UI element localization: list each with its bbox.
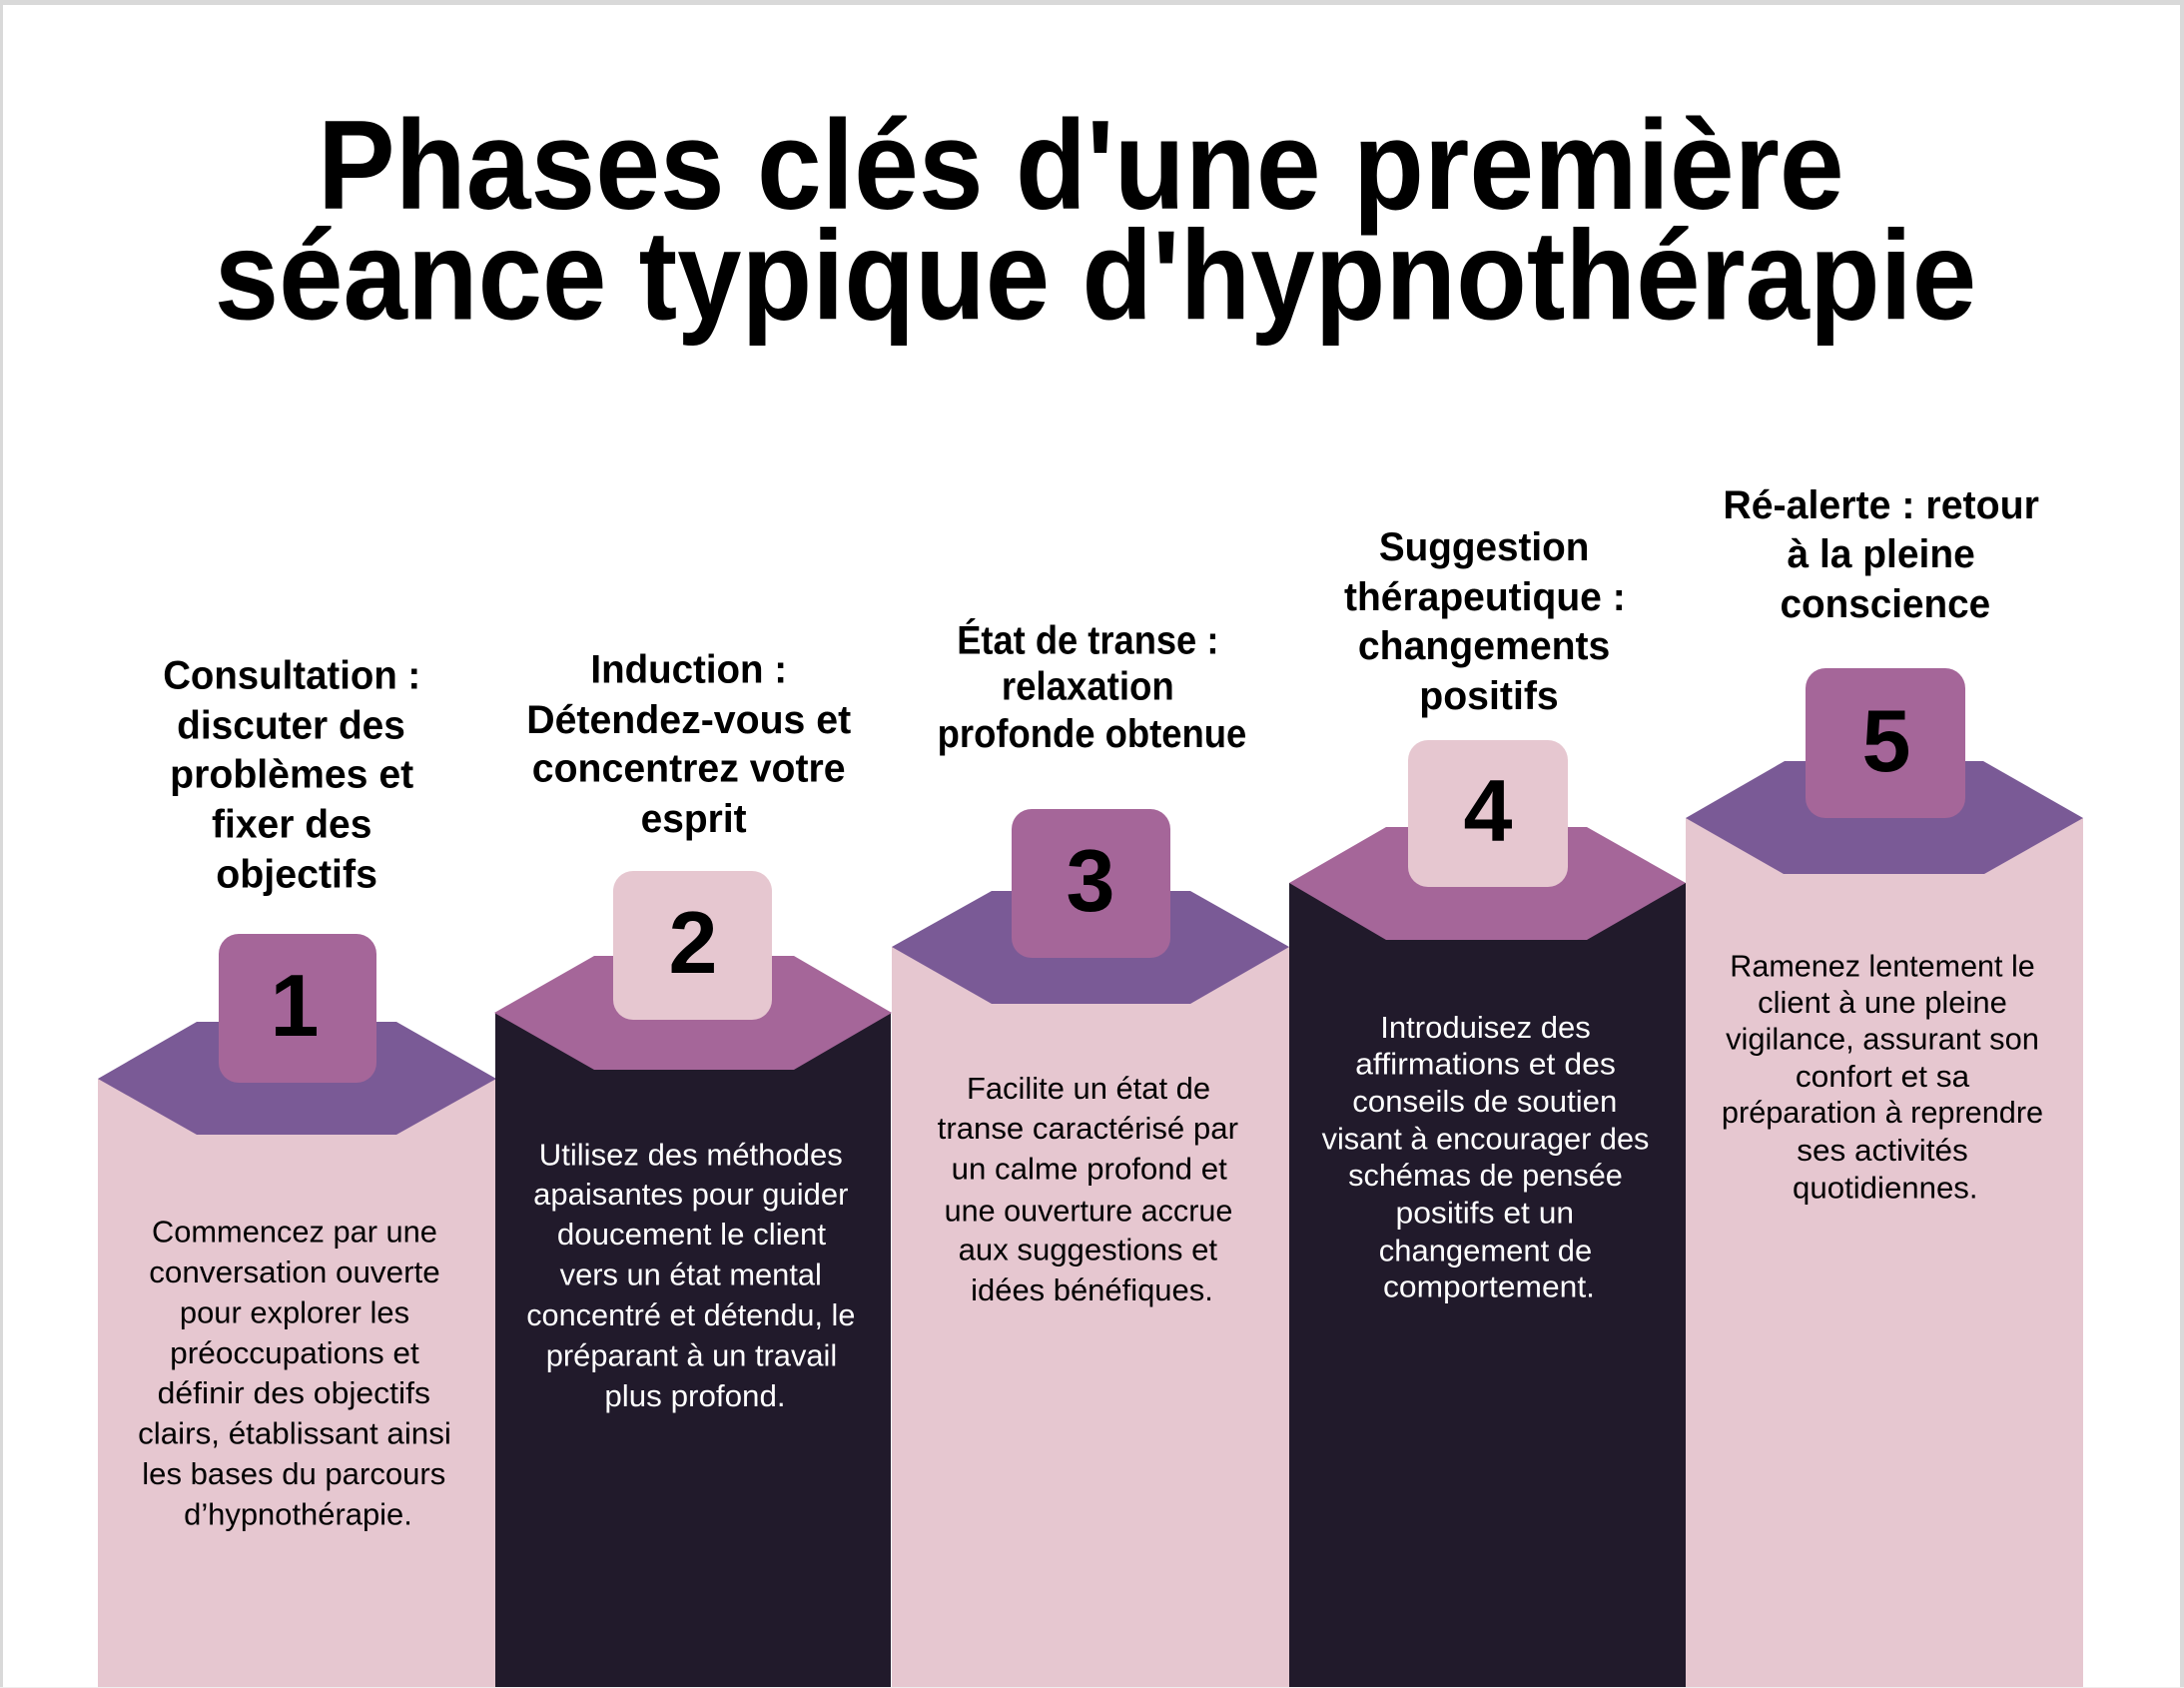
step 5 hexagon: [1686, 761, 2083, 874]
step 4 description: conseils de soutien: [1352, 1084, 1617, 1119]
step 3 description: aux suggestions et: [959, 1233, 1218, 1267]
step 5 description: vigilance, assurant son: [1726, 1021, 2039, 1056]
step 4 heading: positifs: [1419, 674, 1559, 718]
step 5 number: 5: [1862, 691, 1910, 790]
step 2 column: [495, 1013, 891, 1687]
step 2 description: apaisantes pour guider: [533, 1177, 848, 1212]
step 4 description: comportement.: [1383, 1269, 1595, 1304]
step 1 heading: problèmes et: [170, 752, 413, 796]
panel: step 5 re-alerte: [1686, 483, 2083, 1687]
step 3 description: un calme profond et: [952, 1152, 1227, 1187]
step 4 description: affirmations et des: [1355, 1046, 1616, 1081]
step 5 description: ses activités: [1797, 1133, 1968, 1168]
step 1 description: pour explorer les: [180, 1294, 409, 1329]
step 5 description: [1722, 949, 2043, 1206]
step 3 description: idées bénéfiques.: [971, 1272, 1213, 1307]
step 1 heading: fixer des: [212, 803, 371, 847]
panel: step 3 transe: [892, 617, 1289, 1687]
step 1 heading: Consultation :: [163, 653, 420, 697]
step 1 column: [98, 1079, 495, 1687]
step 3 heading: [938, 617, 1246, 756]
title: [215, 94, 1976, 346]
step 1 description: [138, 1214, 451, 1532]
step 4 description: [1322, 1010, 1649, 1304]
step 2 heading: [526, 648, 851, 841]
step 1 description: d’hypnothérapie.: [184, 1497, 412, 1532]
step 5 heading: [1723, 483, 2039, 626]
step 2 description: préparant à un travail: [546, 1338, 837, 1373]
step 2 number: 2: [669, 893, 717, 992]
step 2 number badge: [613, 871, 772, 1020]
step 2 heading: esprit: [641, 797, 747, 841]
step 5 description: quotidiennes.: [1793, 1171, 1978, 1206]
title: Phases clés d'une première: [318, 94, 1844, 236]
step 1 number badge: [219, 934, 376, 1083]
step 4 description: positifs et un: [1396, 1196, 1574, 1231]
step 3 hexagon: [892, 891, 1289, 1004]
step 3 description: une ouverture accrue: [945, 1194, 1232, 1229]
step 1 description: définir des objectifs: [158, 1375, 430, 1410]
step 2 description: Utilisez des méthodes: [539, 1138, 843, 1173]
step 2 heading: concentrez votre: [532, 747, 846, 791]
step 4 number: 4: [1464, 761, 1513, 860]
step 3 description: transe caractérisé par: [938, 1111, 1238, 1146]
step 2 heading: Induction :: [590, 648, 787, 692]
step 5 description: Ramenez lentement le: [1730, 949, 2035, 984]
step 3 column: [892, 947, 1289, 1687]
step 4 description: changement de: [1379, 1233, 1592, 1267]
step 5 heading: à la pleine: [1787, 532, 1975, 576]
step 4 heading: Suggestion: [1379, 525, 1589, 569]
step 3 heading: État de transe :: [957, 617, 1218, 662]
step 3 heading: relaxation: [1002, 664, 1174, 708]
step 1 description: Commencez par une: [152, 1214, 437, 1249]
step 2 description: vers un état mental: [560, 1258, 822, 1292]
step 1 heading: objectifs: [216, 853, 377, 897]
step 3 description: [938, 1071, 1238, 1307]
step 4 heading: [1344, 525, 1626, 718]
step 5 column: [1686, 818, 2083, 1687]
step 1 description: clairs, établissant ainsi: [138, 1416, 451, 1451]
step 2 description: concentré et détendu, le: [526, 1297, 855, 1332]
step 1 description: préoccupations et: [170, 1335, 419, 1370]
step 4 heading: changements: [1358, 624, 1610, 668]
panel: step 1 consultation: [98, 653, 496, 1687]
step 2 hexagon: [494, 956, 892, 1070]
step 2 description: doucement le client: [557, 1217, 827, 1252]
step 1 description: conversation ouverte: [149, 1255, 440, 1289]
step 4 hexagon: [1289, 827, 1686, 940]
step 1 heading: discuter des: [177, 704, 405, 748]
panel: step 2 induction: [494, 648, 892, 1687]
step 5 heading: Ré-alerte : retour: [1723, 483, 2039, 527]
step 2 description: [526, 1138, 855, 1413]
step 3 number: 3: [1067, 831, 1114, 930]
step 2 description: plus profond.: [604, 1378, 786, 1413]
step 4 description: visant à encourager des: [1322, 1122, 1649, 1157]
step 2 heading: Détendez-vous et: [526, 698, 851, 742]
step 5 number badge: [1806, 668, 1965, 818]
step 1 number: 1: [271, 956, 319, 1055]
step 4 description: Introduisez des: [1380, 1010, 1591, 1045]
step 3 description: Facilite un état de: [967, 1071, 1210, 1106]
step 3 number badge: [1012, 809, 1170, 958]
step 1 hexagon: [98, 1022, 496, 1135]
step 4 description: schémas de pensée: [1348, 1158, 1623, 1193]
step 5 description: confort et sa: [1796, 1059, 1970, 1094]
step 5 heading: conscience: [1781, 582, 1990, 626]
title: séance typique d'hypnothérapie: [215, 204, 1976, 346]
step 4 heading: thérapeutique :: [1344, 575, 1626, 619]
step 1 heading: [163, 653, 420, 897]
step 1 description: les bases du parcours: [142, 1456, 445, 1491]
step 5 description: client à une pleine: [1758, 985, 2007, 1020]
step 4 column: [1289, 883, 1686, 1687]
step 4 number badge: [1408, 740, 1568, 887]
panel: step 4 suggestion: [1289, 525, 1686, 1687]
step 5 description: préparation à reprendre: [1722, 1095, 2043, 1130]
step 3 heading: profonde obtenue: [938, 712, 1246, 756]
